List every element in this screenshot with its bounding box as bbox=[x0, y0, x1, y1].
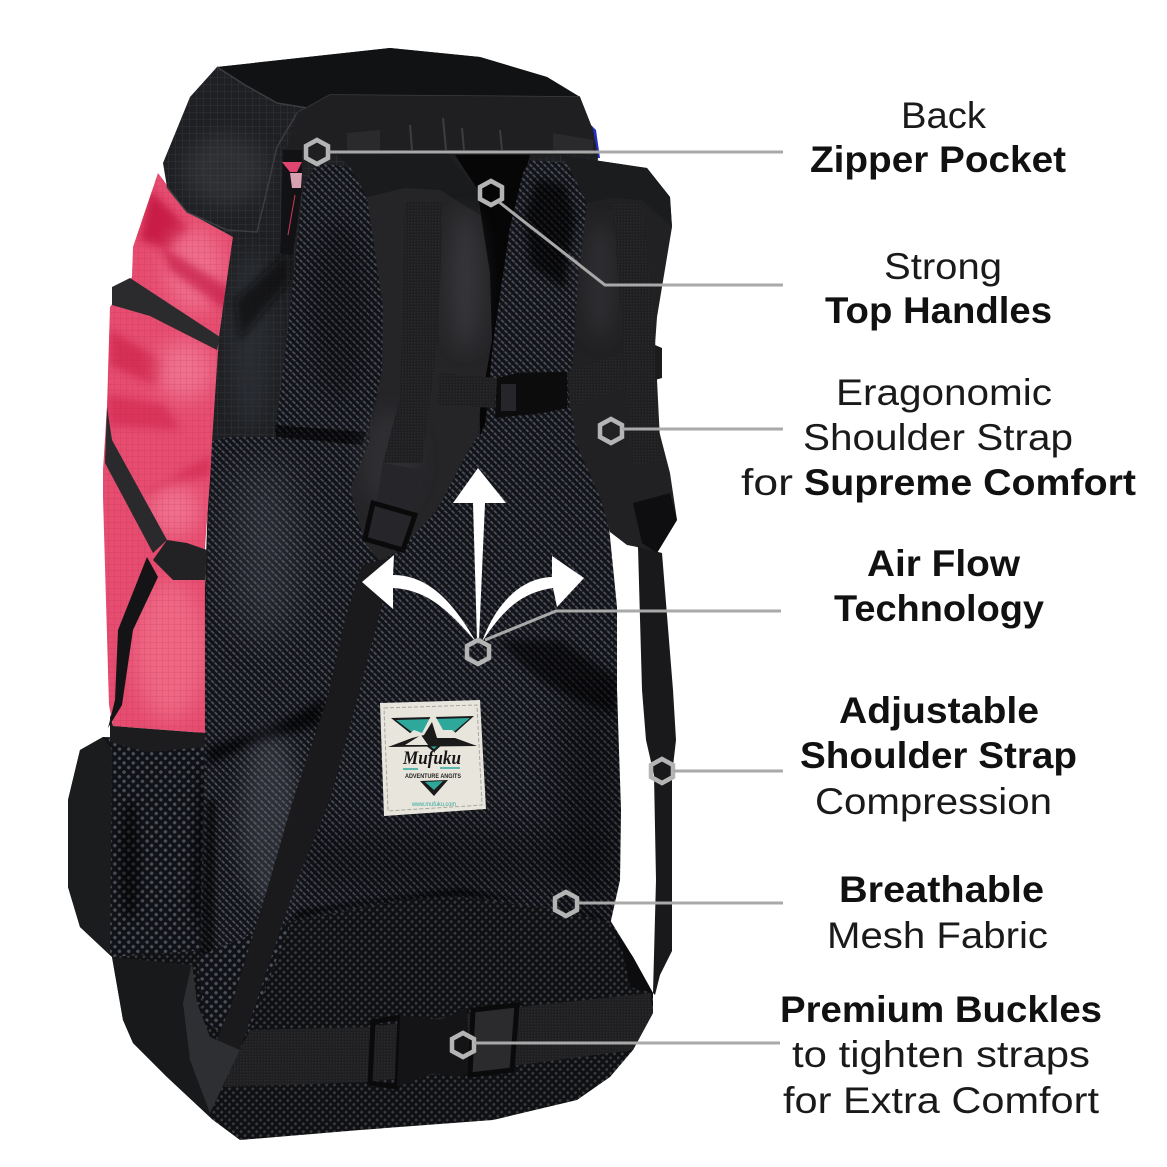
zipper pull bbox=[280, 150, 302, 255]
callout: buckles bbox=[452, 1033, 780, 1057]
lower triangle bbox=[420, 780, 448, 796]
hip inner mesh left bbox=[197, 925, 290, 1037]
backpack illustration bbox=[68, 48, 677, 1140]
hip pad bbox=[250, 897, 630, 1028]
website: www.mufuku.com bbox=[411, 802, 456, 808]
label: ergonomic shoulder strap: for bbox=[741, 462, 793, 503]
label: adjustable shoulder strap: Shoulder Strap bbox=[800, 735, 1077, 776]
label: breathable mesh fabric: Breathable bbox=[839, 869, 1044, 910]
label: premium buckles: Premium Buckles bbox=[780, 989, 1102, 1030]
long right strap bbox=[638, 547, 676, 995]
label: breathable mesh fabric bbox=[827, 869, 1048, 956]
long left strap bbox=[217, 556, 395, 1050]
woven brand label bbox=[380, 700, 486, 816]
lower left ripstop bbox=[112, 957, 213, 1120]
handle tabs bbox=[347, 130, 593, 155]
label: ergonomic shoulder strap: Eragonomic bbox=[836, 372, 1052, 413]
hip buckle bbox=[370, 1005, 517, 1087]
callout: shoulder strap comfort bbox=[600, 419, 783, 443]
top lid bbox=[217, 48, 580, 108]
pink side panel bbox=[100, 170, 240, 740]
upper black body bbox=[163, 48, 598, 442]
right shoulder pad bbox=[560, 155, 677, 553]
mesh patch below chest buckle bbox=[480, 417, 575, 438]
callout: mesh fabric bbox=[555, 892, 783, 916]
right strap buckle bbox=[633, 493, 677, 553]
brand name: Mufuku bbox=[402, 748, 461, 769]
label: back zipper pocket bbox=[810, 95, 1066, 180]
upper back fabric streaks bbox=[410, 118, 502, 150]
label: adjustable shoulder strap bbox=[800, 690, 1077, 822]
callout: top handles bbox=[480, 181, 783, 285]
centre gap bbox=[455, 155, 530, 435]
tagline: ADVENTURE ANGITS bbox=[405, 773, 462, 780]
airflow arrows bbox=[362, 468, 584, 642]
left shoulder pad mesh bbox=[275, 163, 383, 445]
hip pad side gusset bbox=[610, 923, 653, 993]
label: strong top handles bbox=[825, 246, 1052, 331]
label: premium buckles: to tighten straps bbox=[792, 1034, 1090, 1075]
left arrow bbox=[362, 555, 476, 642]
right shoulder pad mesh bbox=[484, 160, 587, 439]
label: breathable mesh fabric: Mesh Fabric bbox=[827, 915, 1048, 956]
back mesh panel bbox=[200, 437, 621, 955]
upper back fabric bbox=[283, 95, 598, 190]
left strap buckle bbox=[365, 503, 415, 550]
callout: zipper pocket bbox=[306, 140, 783, 164]
left strap bbox=[383, 202, 443, 463]
label: premium buckles: for Extra Comfort bbox=[783, 1080, 1100, 1121]
callout: air flow bbox=[467, 611, 781, 664]
left strap lower section bbox=[365, 463, 422, 550]
label: air flow technology: Technology bbox=[834, 588, 1044, 629]
label: adjustable shoulder strap: Compression bbox=[815, 781, 1052, 822]
pocket outer fold bbox=[68, 737, 112, 957]
label: back zipper pocket: Zipper Pocket bbox=[810, 139, 1066, 180]
side mesh pocket bbox=[68, 714, 210, 960]
side webbing panel bbox=[183, 963, 240, 1113]
label: strong top handles: Top Handles bbox=[825, 290, 1052, 331]
up arrow bbox=[453, 468, 506, 640]
label: ergonomic shoulder strap: Supreme Comfort bbox=[804, 462, 1136, 503]
chest strap and buckle bbox=[437, 345, 662, 418]
left shoulder pad bbox=[337, 153, 492, 562]
lid seam bbox=[167, 67, 580, 232]
side strap buckle bbox=[153, 540, 207, 580]
dark underlay bbox=[200, 235, 260, 733]
label: ergonomic shoulder strap: Shoulder Strap bbox=[803, 417, 1073, 458]
label: adjustable shoulder strap: Adjustable bbox=[839, 690, 1039, 731]
teal ornament bbox=[403, 768, 460, 769]
label: air flow technology: Air Flow bbox=[867, 543, 1020, 584]
pocket rim bbox=[110, 714, 207, 752]
hip pad shadow bbox=[287, 888, 610, 923]
right strap bbox=[612, 202, 661, 465]
label: air flow technology bbox=[834, 543, 1044, 629]
side compression strap bbox=[105, 407, 167, 553]
label: premium buckles bbox=[780, 989, 1102, 1121]
lower side strap bbox=[108, 557, 158, 728]
pocket zipper strap bbox=[112, 278, 220, 350]
label: strong top handles: Strong bbox=[884, 246, 1002, 287]
label: ergonomic shoulder strap bbox=[741, 372, 1136, 503]
callout: adjustable strap bbox=[651, 759, 783, 783]
label: back zipper pocket: Back bbox=[901, 95, 987, 136]
lower black base bbox=[112, 920, 653, 1140]
hip belt bbox=[223, 993, 653, 1087]
right arrow bbox=[482, 556, 584, 642]
logo triangle and mountains bbox=[388, 712, 477, 752]
side sliver blue bbox=[591, 125, 600, 158]
